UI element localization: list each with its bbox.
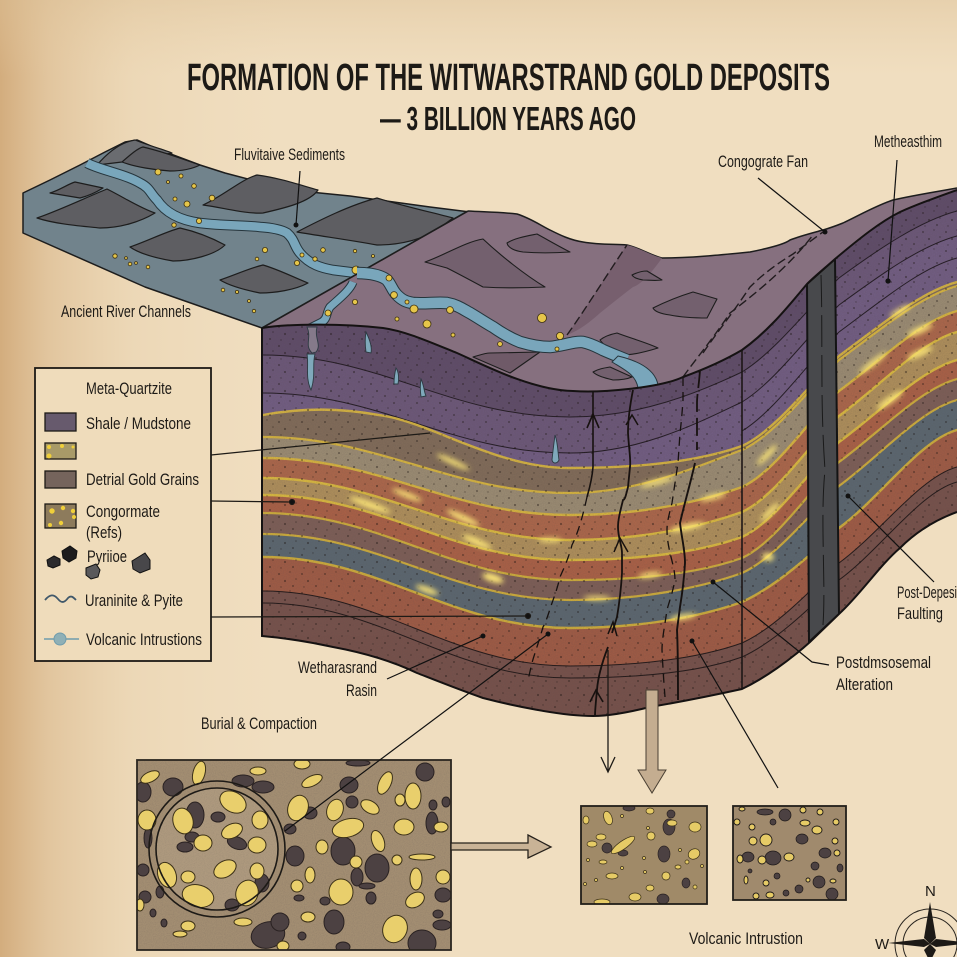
layer: tan-grey quartzite <box>263 285 957 514</box>
gold grains on plain <box>113 169 375 313</box>
river on plain <box>87 163 357 273</box>
layer: red band with dot <box>263 358 957 579</box>
label: fluvial sediments: Fluvitaive Sediments <box>234 146 345 164</box>
label: witwatersrand basin: Rasin <box>346 682 377 700</box>
legend: shale <box>45 413 191 433</box>
right-face edge <box>741 350 743 689</box>
layer: blue-grey <box>263 399 957 627</box>
layer: middle purple band <box>263 210 957 452</box>
gold glow highlights <box>348 303 934 622</box>
fault lines with arrows <box>528 370 700 716</box>
arrow: thick downward <box>638 690 666 793</box>
dark pebbles <box>135 760 451 956</box>
layer: plum-brown <box>263 378 957 599</box>
dyke cracks <box>821 275 825 625</box>
layer: upper purple shale <box>263 191 957 416</box>
ancient land surface: purple upland <box>262 188 957 400</box>
lens tint <box>156 788 278 910</box>
cross-section block <box>263 191 957 715</box>
legend: conglomerate reefs <box>45 502 160 542</box>
dashed surface faults <box>567 232 823 377</box>
mountains on plain <box>37 140 453 293</box>
label: post-depositional alteration <box>710 580 931 694</box>
label: post-depositional alteration: Postdmsosemal <box>836 654 931 672</box>
label: volcanic intrusion: Volcanic Intrustion <box>689 930 803 948</box>
layer: red-orange reef <box>263 310 957 539</box>
layer: brown band above tan <box>263 280 957 492</box>
compass rose: W <box>875 936 890 953</box>
block outline <box>262 190 957 716</box>
legend leader lines <box>211 433 530 618</box>
legend: shale: Shale / Mudstone <box>86 414 191 433</box>
grain texture <box>263 281 957 665</box>
river on upland <box>357 273 627 360</box>
fold ridge on upland <box>567 245 662 335</box>
compass rose: N <box>925 883 936 900</box>
strata line in right face <box>742 258 957 431</box>
mountains on upland <box>425 234 717 380</box>
leader: sample line <box>690 638 778 788</box>
legend: volcanic intrusions <box>44 630 202 649</box>
legend: uraninite <box>45 591 183 610</box>
layer: red-brown <box>263 428 957 666</box>
legend: gold swatch <box>45 443 76 459</box>
tributary <box>310 282 353 328</box>
legend: meta-quartzite: Meta-Quartzite <box>86 379 172 398</box>
legend: pyrite <box>47 546 150 579</box>
label: fluvial sediments <box>234 146 345 228</box>
label: conglomerate fan: Congograte Fan <box>718 153 808 171</box>
dark volcanic dyke <box>807 259 839 642</box>
legend: volcanic intrusions: Volcanic Intrustions <box>86 630 202 649</box>
layer: lower purple band <box>263 236 957 466</box>
label: ancient river channels: Ancient River Channels <box>61 303 191 321</box>
gold grains on upland <box>325 275 564 351</box>
label: post-deposition faulting <box>846 494 957 623</box>
legend: conglomerate reefs: Congormate <box>86 502 160 521</box>
label: conglomerate fan <box>718 153 828 234</box>
sample inset B <box>733 806 846 900</box>
river delta end <box>612 356 658 388</box>
label: burial and compaction: Burial & Compaction <box>201 715 317 733</box>
title <box>187 57 830 137</box>
label: post-depositional alteration: Alteration <box>836 676 893 694</box>
sample inset A <box>581 805 707 905</box>
legend: uraninite: Uraninite & Pyite <box>85 591 183 610</box>
arrow: inset to samples <box>451 835 551 858</box>
arrow: thin downward <box>601 650 615 772</box>
label: witwatersrand basin: Wetharasrand <box>298 659 377 677</box>
labels with leader lines <box>61 133 957 948</box>
legend: pyrite: Pyriioe <box>87 547 127 566</box>
water seeps on the block face <box>307 327 559 463</box>
leader from magnifier to reef <box>285 632 550 831</box>
legend panel <box>35 368 211 661</box>
gold nuggets <box>136 759 450 951</box>
legend: detrital gold grains: Detrial Gold Grains <box>86 470 199 489</box>
label: metamorphism <box>874 133 942 284</box>
layer: golden band <box>263 330 957 559</box>
label: witwatersrand basin <box>298 634 486 700</box>
layer: dark brown base <box>263 466 957 715</box>
stipple texture <box>258 180 957 720</box>
legend: detrital gold grains <box>45 470 199 489</box>
magnifier circle <box>149 781 285 917</box>
title: — 3 BILLION YEARS AGO <box>380 100 636 137</box>
strata line in base <box>263 482 957 678</box>
large conglomerate inset <box>135 759 451 956</box>
compass rose <box>875 883 957 957</box>
label: post-deposition faulting: Faulting <box>897 605 943 623</box>
ancient land surface: grey-blue river plain <box>23 140 470 328</box>
legend: conglomerate reefs: (Refs) <box>86 523 122 542</box>
